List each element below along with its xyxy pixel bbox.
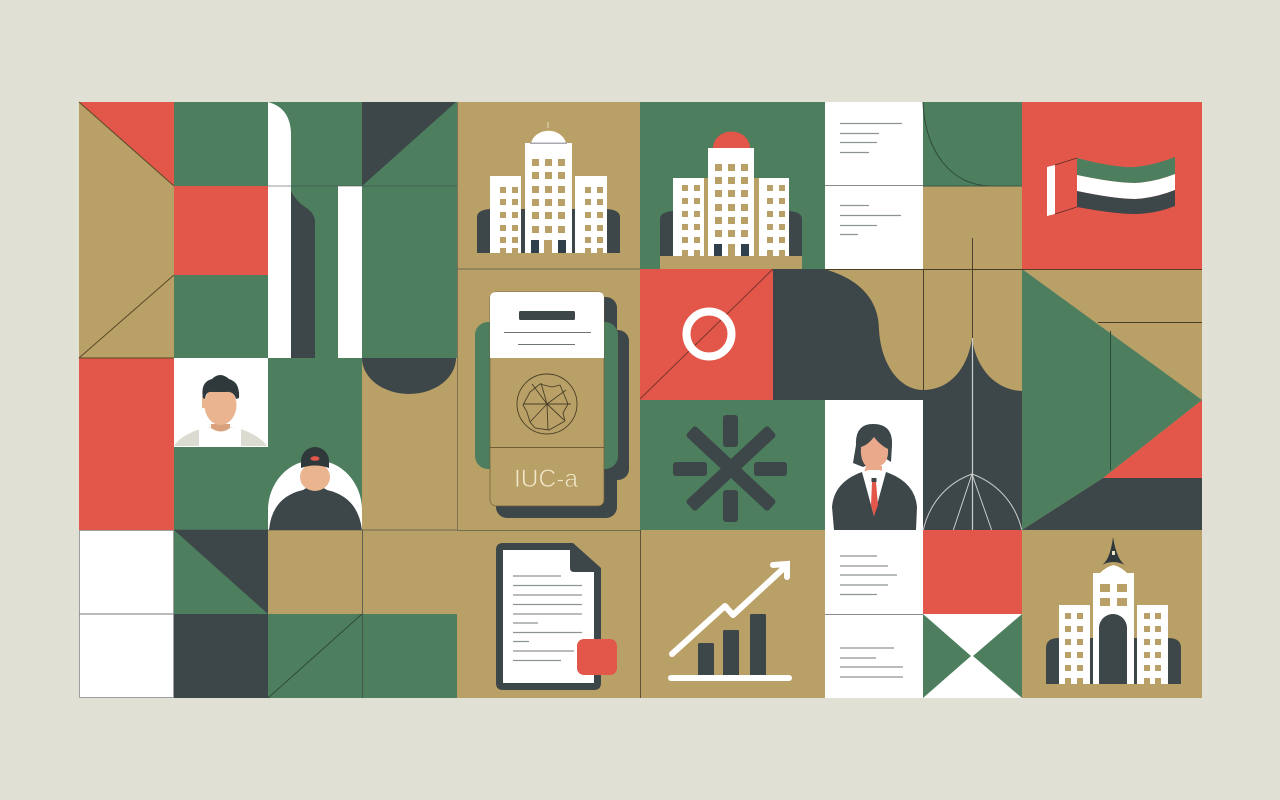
panel: left tile group, bottom: [79, 530, 457, 698]
panel: left tile group, top: [79, 102, 457, 358]
panel: red tile with ring: [640, 269, 773, 400]
panel: dome tile with curved shapes: [773, 238, 1022, 531]
panel: document tile: [457, 530, 825, 698]
panel: woman in suit portrait: [825, 400, 923, 530]
icon: ring: [686, 312, 732, 356]
trend arrow: [671, 564, 789, 678]
icon: flag: [1047, 157, 1175, 216]
panel: green quarter curve tile: [923, 102, 1022, 269]
panel: growth chart tile: [640, 530, 825, 698]
passport label text: IUC-a: [514, 465, 578, 493]
panel: text tile pair, bottom: [825, 530, 923, 698]
panel: tower building tile: [1022, 530, 1202, 698]
panel: red and hourglass tile: [923, 530, 1022, 698]
panel: text tile pair, top: [825, 102, 923, 269]
panel: green tile with asterisk: [640, 400, 825, 530]
icon: wireframe dome: [923, 338, 1022, 531]
icon: asterisk: [673, 415, 787, 522]
panel: triangle composition: [1022, 269, 1202, 530]
panel: building on green: [640, 102, 825, 269]
panel: passport card: [457, 102, 640, 698]
panel: red flag tile: [1022, 102, 1202, 269]
panel: left tile group, middle: [79, 358, 457, 530]
icon: person with cap: [268, 447, 362, 530]
icon: document: [496, 543, 617, 690]
bar chart: [698, 614, 766, 676]
panel: building on gold: [457, 102, 640, 269]
icon: passport emblem: [517, 374, 577, 434]
icon: person with short hair: [174, 375, 267, 446]
